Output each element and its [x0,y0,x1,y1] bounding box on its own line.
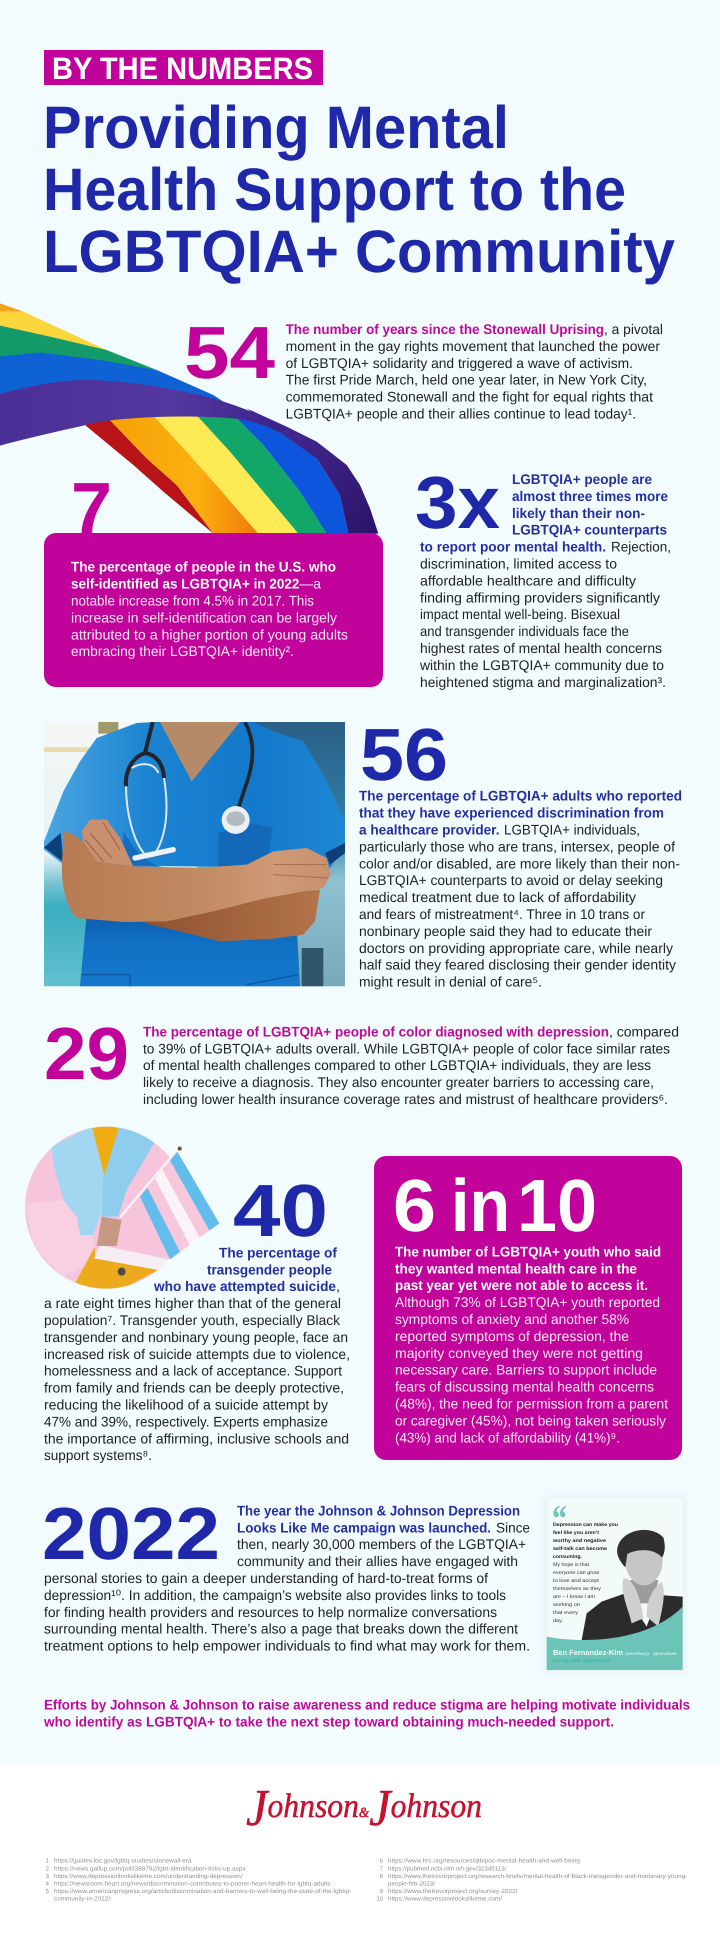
text: poor mental health: impact mental well-being. Bisexual [420,606,620,622]
text: stonewall: moment in the gay rights movement that launched the power [286,338,660,354]
text: poster quote: feel like you aren’t [553,1530,599,1536]
references: left column: community-in-2022/ [54,1896,110,1903]
text: transgender: The percentage of [219,1244,337,1260]
number: 56: 56 [360,713,448,796]
number: 2022: 2022 [42,1492,220,1575]
text: stonewall: The first Pride March, held one year later, in New York City, [286,372,647,388]
text: discrimination: color and/or disabled, are more likely than their non- [359,855,680,871]
closing statement [43,1697,690,1730]
text: discrimination [359,788,682,990]
title: LGBTQIA+ Community [43,218,676,285]
references: right column: people-feb-2023/ [388,1880,435,1887]
text: people of color [143,1023,679,1107]
text: poster name: Ben Fernandez-Kim [553,1648,623,1657]
panel: 7 percent card: The percentage of people in the U.S. who [71,559,336,575]
text: transgender: population⁷. Transgender youth, especially Black [44,1312,341,1328]
references: right column: https://www.thetrevorproject.org/research-briefs/mental-health-of-black-transgender-and-nonbinary-young- [388,1873,687,1880]
panel: 7 percent card [44,533,383,687]
logo: Johnson & Johnson: ohnson [391,1788,482,1825]
title [43,94,676,285]
text: campaign: Since [496,1519,530,1535]
stat: 54 [184,311,663,422]
text: poor mental health: discrimination, limited access to [420,556,617,572]
references: left column: 3 [46,1873,50,1880]
portrait: Ben Fernandez-Kim [547,1530,683,1670]
text: transgender [44,1244,350,1463]
text: youth: symptoms of anxiety and another 58% [395,1311,629,1327]
number: 29: 29 [44,1012,129,1095]
text: poor mental health: heightened stigma and marginalization³. [420,674,666,690]
text: stonewall: The number of years since the Stonewall Uprising [286,321,604,337]
text: stonewall: , a pivotal [604,321,663,337]
references: right column [376,1858,687,1903]
text: discrimination: LGBTQIA+ individuals, [504,822,640,838]
panel: 7 percent card: increase in self-identification can be largely [71,609,337,625]
text: youth: reported symptoms of depression, the [395,1328,629,1344]
icon: quotation mark: “ [552,1498,567,1540]
title: Providing Mental [43,94,509,161]
text: discrimination: medical treatment due to lack of affordability [359,889,636,905]
stat: 29 [44,1012,679,1107]
text: discrimination: might result in denial of care⁵. [359,974,542,990]
text: discrimination: LGBTQIA+ counterparts to avoid or delay seeking [359,872,663,888]
references: right column: 6 [380,1858,384,1865]
text: transgender: from family and friends can be deeply protective, [44,1380,344,1396]
text: campaign: depression¹⁰. In addition, the campaign’s website also provides links to tools [44,1587,506,1603]
text: poor mental health [419,471,671,690]
text: youth: or caregiver (45%), not being taken seriously [395,1412,666,1428]
image: person holding transgender pride flag [20,1120,219,1293]
panel: 6 in 10 card [374,1156,682,1460]
text: youth: majority conveyed they were not getting [395,1345,643,1361]
text: people of color: , compared [609,1023,679,1039]
text: poster quote: worthy and negative [552,1538,606,1544]
image: nurse with stethoscope [44,722,345,986]
text: poster quote: to love and accept [553,1578,600,1584]
text: poster quote: working on [553,1602,580,1608]
text: transgender: increased risk of suicide attempts due to violence, [44,1346,350,1362]
text: transgender: , [336,1278,340,1294]
references: left column: 4 [46,1880,50,1887]
references: right column: https://www.thetrevorproject.org/survey-2022/ [388,1888,518,1895]
number: 3x: 3x [415,461,500,544]
text: campaign: surrounding mental health. There’s also a page that breaks down the different [44,1621,518,1637]
text: poor mental health: and transgender individuals face the [420,623,629,639]
references: left column: 2 [46,1865,50,1872]
text: campaign: then, nearly 30,000 members of the LGBTQIA+ [237,1536,526,1552]
text: poster quote: that every [553,1610,579,1616]
text: poster quote: everyone can grow [553,1570,599,1576]
text: poster name: @bentheir [653,1651,678,1656]
text: campaign: personal stories to gain a deeper understanding of hard-to-treat forms of [44,1570,488,1586]
text: poor mental health: LGBTQIA+ counterparts [512,522,667,538]
footer background [0,1765,720,1958]
arms [143,890,320,941]
number: 6 in 10 [393,1164,597,1247]
logo: Johnson & Johnson [246,1780,482,1837]
panel: 7 percent card: —a [299,576,321,592]
number: 6 in 10: 10 [517,1164,597,1247]
logo: Johnson & Johnson: J [369,1780,393,1837]
text: transgender: transgender and nonbinary young people, face an [44,1329,348,1345]
text: youth: (43%) and lack of affordability (41%)⁹. [395,1429,620,1445]
text: poor mental health: likely than their non- [512,505,645,521]
references: left column: https://newsroom.heart.org/news/discrimination-contributes-to-poorer-heart-health-for-lgbtq-adults [54,1880,331,1887]
title: Health Support to the [43,156,626,223]
text: poor mental health: to report poor mental health. [420,539,606,555]
closing statement: Efforts by Johnson & Johnson to raise awareness and reduce stigma are helping motivate individuals [44,1697,690,1713]
text: campaign: community and their allies have engaged with [237,1553,518,1569]
references: left column: https://news.gallup.com/poll/389792/lgbt-identification-ticks-up.aspx [54,1865,246,1872]
number: 54: 54 [184,311,275,394]
text: discrimination: doctors on providing appropriate care, while nearly [359,940,673,956]
stat: 56 [359,713,682,990]
number: 6 in 10: in [451,1164,510,1247]
text: transgender: the importance of affirming, inclusive schools and [44,1430,349,1446]
stat: 3x [415,461,671,690]
text: transgender: 47% and 39%, respectively. Experts emphasize [44,1413,328,1429]
references: left column [46,1858,351,1903]
text: campaign [44,1502,530,1654]
logo: Johnson & Johnson: ohnson [267,1788,359,1825]
text: poor mental health: highest rates of mental health concerns [420,640,662,656]
image: rainbow pride flag [0,303,378,534]
references: right column: https://pubmed.ncbi.nlm.nih.gov/32345113/ [388,1865,507,1872]
text: stonewall: commemorated Stonewall and the fight for equal rights that [286,389,653,405]
text: youth: (48%), the need for permission from a parent [395,1396,668,1412]
references: left column: 5 [46,1888,50,1895]
text: poster name [553,1648,678,1664]
text: transgender: transgender people [207,1261,332,1277]
panel: 7 percent card: attributed to a higher portion of young adults [71,626,348,642]
text: youth: The number of LGBTQIA+ youth who said [395,1243,661,1259]
text: people of color: of mental health challenges compared to other LGBTQIA+ individuals, they are less [143,1057,651,1073]
text: discrimination: nonbinary people said they had to educate their [359,923,652,939]
text: people of color: The percentage of LGBTQIA+ people of color diagnosed with depression [143,1023,609,1039]
references: right column: 7 [380,1865,384,1872]
text: poor mental health: LGBTQIA+ people are [512,471,652,487]
text: people of color: including lower health insurance coverage rates and mistrust of healthcare providers⁶. [143,1091,668,1107]
references: right column: 9 [380,1888,384,1895]
text: poster quote: self-talk can become [553,1546,607,1552]
text: campaign: Looks Like Me campaign was launched. [237,1519,491,1535]
text: poster name: (she/they) [625,1651,650,1656]
text: youth: past year yet were not able to access it. [395,1277,648,1293]
text: transgender: reducing the likelihood of a suicide attempt by [44,1396,328,1412]
text: poster quote: My hope is that [553,1562,590,1568]
text: poster quote: are – I know I am [553,1594,595,1600]
panel: 7 percent card: embracing their LGBTQIA+ identity². [71,643,294,659]
text: discrimination: particularly those who are trans, intersex, people of [359,838,675,854]
references: left column: https://www.americanprogress.org/article/discrimination-and-barriers-to-well-being-the-state-of-the-lgbtqi- [54,1888,351,1895]
text: poor mental health: within the LGBTQIA+ community due to [419,657,664,673]
text: poor mental health: finding affirming providers significantly [420,589,660,605]
panel: 7 percent card: self-identified as LGBTQIA+ in 2022 [71,576,300,592]
text: transgender: a rate eight times higher than that of the general [44,1295,341,1311]
references: left column: 1 [46,1858,50,1865]
text: campaign: The year the Johnson & Johnson Depression [237,1502,520,1518]
logo: Johnson & Johnson: J [246,1780,270,1837]
text: poster quote: themselves as they [553,1586,602,1592]
text: discrimination: that they have experienced discrimination from [359,805,664,821]
panel: 7 percent card: notable increase from 4.5% in 2017. This [71,592,314,608]
text: stonewall: of LGBTQIA+ solidarity and triggered a wave of activism. [286,355,633,371]
text: youth: Although 73% of LGBTQIA+ youth reported [395,1294,660,1310]
text: people of color: to 39% of LGBTQIA+ adults overall. While LGBTQIA+ people of color face similar rates [143,1040,670,1056]
number: 6 in 10: 6 [393,1164,436,1247]
text: campaign: for finding health providers and resources to help normalize conversations [44,1604,497,1620]
text: poor mental health: affordable healthcare and difficulty [420,572,636,588]
text: transgender: who have attempted suicide [153,1278,336,1294]
stat: 40 [44,1169,350,1463]
text: discrimination: The percentage of LGBTQIA+ adults who reported [359,788,682,804]
text: transgender: support systems⁸. [44,1447,152,1463]
text: transgender: homelessness and a lack of acceptance. Support [44,1363,342,1379]
text: poor mental health: Rejection, [611,539,671,555]
text: poor mental health: almost three times more [512,488,668,504]
text: youth: necessary care. Barriers to support include [395,1362,657,1378]
stethoscope [126,722,164,786]
references: left column: https://www.depressionlookslikeme.com/understanding-depression/ [54,1873,243,1880]
text: stonewall [286,321,663,422]
text: discrimination: and fears of mistreatment⁴. Three in 10 trans or [359,906,645,922]
text: poster name: Living with depression [553,1658,611,1664]
text: campaign: treatment options to help empower individuals to find what may work for them. [44,1638,530,1654]
text: discrimination: half said they feared disclosing their gender identity [359,957,676,973]
text: youth [395,1243,668,1445]
text: poster quote [552,1522,618,1624]
references: left column: https://guides.loc.gov/lgbtq-studies/stonewall-era [54,1858,192,1865]
text: people of color: likely to receive a diagnosis. They also encounter greater barriers to accessing care, [143,1074,654,1090]
text: poster quote: day. [553,1618,563,1624]
badge: by the numbers: BY THE NUMBERS [52,51,313,86]
references: right column: https://www.hrc.org/resources/qtbipoc-mental-health-and-well-being [388,1858,580,1865]
image: campaign poster [545,1496,685,1672]
text: poster quote: Depression can make you [553,1522,618,1528]
closing statement: who identify as LGBTQIA+ to take the next step toward obtaining much-needed support. [43,1714,614,1730]
logo: Johnson & Johnson: & [359,1806,369,1821]
text: discrimination: a healthcare provider. [359,822,500,838]
stat: 2022 [42,1492,530,1654]
text: youth: fears of discussing mental health concerns [395,1379,654,1395]
references: right column: https://www.depressionlookslikeme.com/ [388,1896,502,1903]
references: right column: 8 [380,1873,384,1880]
text: stonewall: LGBTQIA+ people and their allies continue to lead today¹. [286,406,636,422]
references: right column: 10 [376,1896,384,1903]
text: poster quote: consuming. [553,1554,583,1560]
text: youth: they wanted mental health care in the [395,1260,637,1276]
number: 7: 7 [71,467,112,550]
number: 40: 40 [233,1169,328,1252]
